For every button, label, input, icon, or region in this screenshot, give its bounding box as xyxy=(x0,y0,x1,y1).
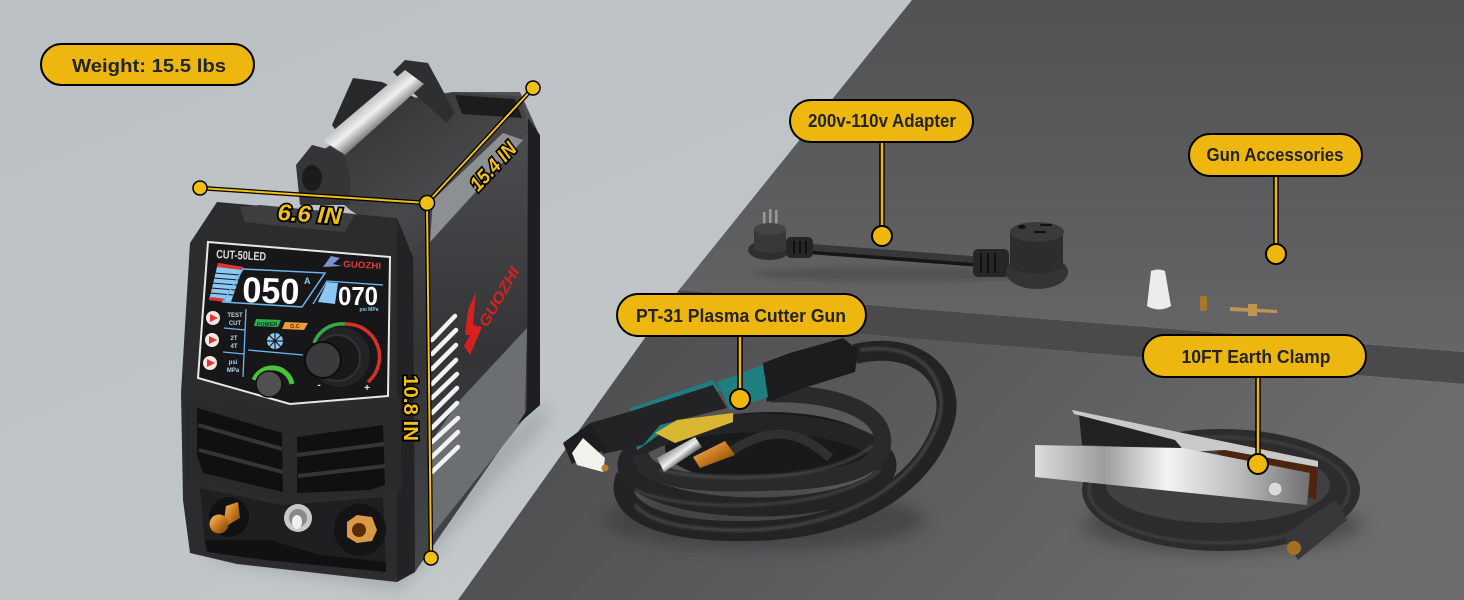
brass tip xyxy=(602,464,608,472)
width dimension: 6.6 IN xyxy=(277,199,343,229)
dc indicator xyxy=(282,322,308,330)
middle coil xyxy=(627,423,887,507)
front right column xyxy=(397,218,415,582)
plug top xyxy=(754,223,786,235)
trigger xyxy=(655,413,733,443)
adapter cable xyxy=(748,209,1068,289)
amps bar red bottom xyxy=(209,297,226,302)
left copper connector xyxy=(210,502,240,534)
vent slats xyxy=(198,425,385,476)
left socket xyxy=(209,497,249,537)
cable dark edge xyxy=(805,252,978,265)
dimension dots xyxy=(193,81,540,565)
button labels: psi xyxy=(229,360,238,366)
amps frame xyxy=(223,269,325,307)
dial minus and plus xyxy=(317,380,370,394)
front housing xyxy=(181,202,415,582)
plug barrel xyxy=(754,230,786,253)
inner hose xyxy=(730,434,830,458)
label: plasma cutter gun: PT-31 Plasma Cutter Gun xyxy=(636,305,846,326)
right hex connector xyxy=(347,515,377,543)
label: gun accessories xyxy=(1189,134,1362,176)
centre chrome connector xyxy=(284,504,312,532)
grip xyxy=(590,385,727,454)
main dial knob xyxy=(305,342,341,378)
panel logo mark xyxy=(323,256,342,267)
brass connector xyxy=(693,441,735,468)
button labels: MPa xyxy=(227,368,240,374)
rear collar xyxy=(763,338,858,402)
ceramic tip xyxy=(572,438,605,472)
brass terminal xyxy=(1287,541,1301,555)
rear edge strip xyxy=(517,118,540,425)
callout dots xyxy=(730,226,1286,474)
amps reading: 050 xyxy=(242,269,300,312)
lower side reflection xyxy=(432,328,527,535)
amps bar gauge xyxy=(209,263,243,302)
background: lower dark floor xyxy=(458,290,1464,600)
coil interior xyxy=(665,412,875,484)
pressure bar gauge xyxy=(318,282,338,304)
small dial green arc xyxy=(254,368,292,384)
top coil xyxy=(640,394,883,483)
button test/cut xyxy=(206,311,220,325)
dc indicator: D.C xyxy=(290,324,300,330)
right socket xyxy=(334,504,386,556)
earth plug xyxy=(1283,500,1347,560)
main dial collar xyxy=(314,335,360,381)
background: raised platform top xyxy=(679,0,1464,352)
background: raised platform front face xyxy=(664,290,1464,384)
brass electrode xyxy=(1200,296,1207,311)
socket slots xyxy=(1018,224,1052,233)
label: adapter xyxy=(790,100,973,142)
plug strain relief xyxy=(786,237,813,258)
label: earth clamp xyxy=(1143,335,1366,377)
copper jaw xyxy=(1210,445,1318,500)
amps bar red top xyxy=(217,263,243,270)
side logo bolt xyxy=(464,292,482,355)
torch head xyxy=(563,423,606,464)
light stripe on top edge xyxy=(430,133,523,242)
rivet xyxy=(1268,482,1282,496)
height dimension: 10.8 IN xyxy=(399,375,421,441)
gauge stripes xyxy=(210,273,240,295)
dimension lines xyxy=(200,88,533,558)
side logo text: GUOZHI xyxy=(476,264,524,330)
bottom recess xyxy=(205,540,386,572)
button psi/MPa xyxy=(203,356,217,370)
socket barrel xyxy=(1010,232,1063,274)
ring highlight xyxy=(1089,437,1349,543)
label: weight: Weight: 15.5 lbs xyxy=(72,55,226,76)
small dial knob xyxy=(256,371,282,397)
label: adapter: 200v-110v Adapter xyxy=(808,110,956,131)
socket top xyxy=(1010,222,1064,242)
label: earth clamp: 10FT Earth Clamp xyxy=(1182,346,1330,367)
vent slots xyxy=(432,316,458,472)
right vent xyxy=(297,425,385,493)
middle coil highlight xyxy=(635,470,880,505)
pressure reading: 070 xyxy=(338,281,378,311)
power indicator xyxy=(254,319,281,328)
dial minus and plus: + xyxy=(364,383,370,394)
front grille frame xyxy=(186,398,402,502)
fan icon xyxy=(267,333,283,349)
earth clamp xyxy=(1035,410,1318,505)
main dial green arc xyxy=(314,324,345,343)
control panel xyxy=(198,242,390,404)
torch cable coils xyxy=(605,349,947,550)
model label: CUT-50LED xyxy=(216,247,267,264)
chrome connector xyxy=(657,437,702,472)
plug base xyxy=(748,240,790,260)
outer coil highlight xyxy=(635,349,941,530)
teal sleeve xyxy=(717,365,768,410)
ceramic shield xyxy=(1147,270,1171,310)
left vent xyxy=(197,408,283,492)
button labels xyxy=(227,313,243,374)
brass diffuser xyxy=(1230,304,1277,316)
outer coil xyxy=(624,351,947,531)
rear grille xyxy=(455,95,522,118)
upper lever dark xyxy=(1079,415,1190,450)
main dial surround xyxy=(310,327,370,387)
rear fin xyxy=(332,78,440,150)
dial minus and plus: - xyxy=(317,380,321,391)
amps unit: A xyxy=(304,276,311,286)
welder machine xyxy=(181,60,540,582)
panel logo: GUOZHI xyxy=(343,259,381,271)
front carry mount xyxy=(296,145,350,205)
callout lines xyxy=(740,142,1276,464)
label: plasma cutter gun xyxy=(617,294,866,336)
coil base xyxy=(1082,429,1360,551)
rear carry mount xyxy=(393,60,455,123)
ring centre xyxy=(1106,447,1330,523)
socket strain relief xyxy=(973,249,1009,277)
main dial red arc xyxy=(345,324,379,382)
top surface xyxy=(300,92,530,250)
cable body xyxy=(805,248,978,261)
top coil highlight xyxy=(660,445,873,478)
gun accessories xyxy=(1147,270,1277,316)
depth dimension: 15.4 IN xyxy=(466,138,522,196)
handle hole xyxy=(302,165,322,191)
socket base xyxy=(1006,255,1068,289)
chrome carry handle xyxy=(322,70,424,155)
callout line fill xyxy=(740,142,1276,464)
adapter shadow xyxy=(750,267,1050,281)
socket recess xyxy=(200,488,386,565)
label: gun accessories: Gun Accessories xyxy=(1206,144,1344,165)
pressure units: psi MPa xyxy=(360,307,379,313)
upper lever xyxy=(1072,410,1318,467)
label: weight xyxy=(41,44,254,85)
machine shadow xyxy=(200,400,550,590)
button labels: 4T xyxy=(230,344,238,350)
plug prongs xyxy=(763,209,778,227)
plasma cutter gun xyxy=(563,338,858,472)
power indicator: POWER xyxy=(257,322,277,328)
button labels: CUT xyxy=(229,321,241,327)
grip teal edge xyxy=(630,380,720,450)
lower jaw xyxy=(1035,445,1310,505)
top recess xyxy=(240,205,355,232)
button labels: 2T xyxy=(230,336,238,342)
button labels: TEST xyxy=(227,313,243,319)
coil shadow xyxy=(605,490,925,550)
divider lines xyxy=(223,309,303,377)
earth clamp coil xyxy=(1082,429,1362,553)
button 2T/4T xyxy=(205,333,219,347)
side panel xyxy=(410,92,540,572)
coil shadow xyxy=(1082,497,1362,553)
pressure frame xyxy=(313,281,383,304)
